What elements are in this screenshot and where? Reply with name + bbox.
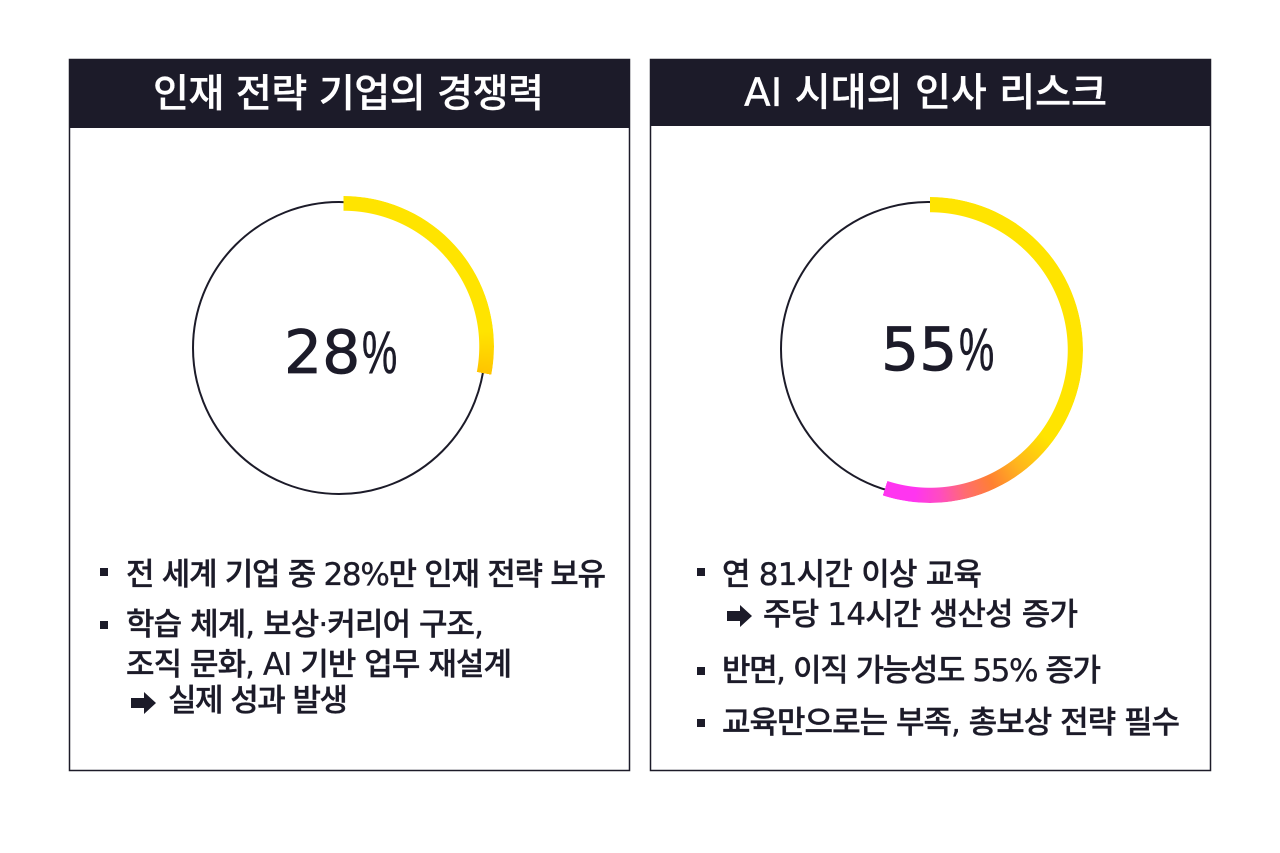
panel: talent strategy competitiveness [69, 59, 630, 770]
text block: AI risk bullets [697, 557, 1180, 741]
heading bar: talent strategy: 인재 전략 기업의 경쟁력 [153, 72, 544, 117]
bullet 1: 주당 14시간 생산성 증가 [763, 597, 1078, 633]
bullet 1: 연 81시간 이상 교육 [722, 557, 982, 593]
bullet 2 [100, 607, 512, 719]
bullet 3: 교육만으로는 부족, 총보상 전략 필수 [722, 705, 1180, 741]
heading bar: talent strategy [69, 59, 630, 128]
panel: AI era HR risk [650, 59, 1211, 770]
donut chart: 28% [192, 196, 494, 496]
text block: talent strategy bullets [100, 557, 606, 719]
donut chart: 55%: % [959, 316, 994, 383]
donut chart: 28%: % [362, 319, 397, 386]
donut chart: 55% [777, 196, 1083, 502]
bullet 2: 반면, 이직 가능성도 55% 증가 [722, 653, 1101, 689]
bullet 2: 학습 체계, 보상·커리어 구조, [126, 607, 484, 643]
donut chart: 55%: 55 [881, 315, 957, 385]
heading bar: AI risk: AI 시대의 인사 리스크 [744, 71, 1107, 116]
donut chart: 28%: 28 [284, 318, 360, 388]
heading bar: AI risk [650, 59, 1211, 126]
bullet 1 [697, 557, 1078, 633]
bullet 1: 전 세계 기업 중 28%만 인재 전략 보유 [126, 557, 606, 593]
bullet 2: 실제 성과 발생 [168, 683, 348, 719]
bullet 2: 조직 문화, AI 기반 업무 재설계 [126, 647, 512, 683]
